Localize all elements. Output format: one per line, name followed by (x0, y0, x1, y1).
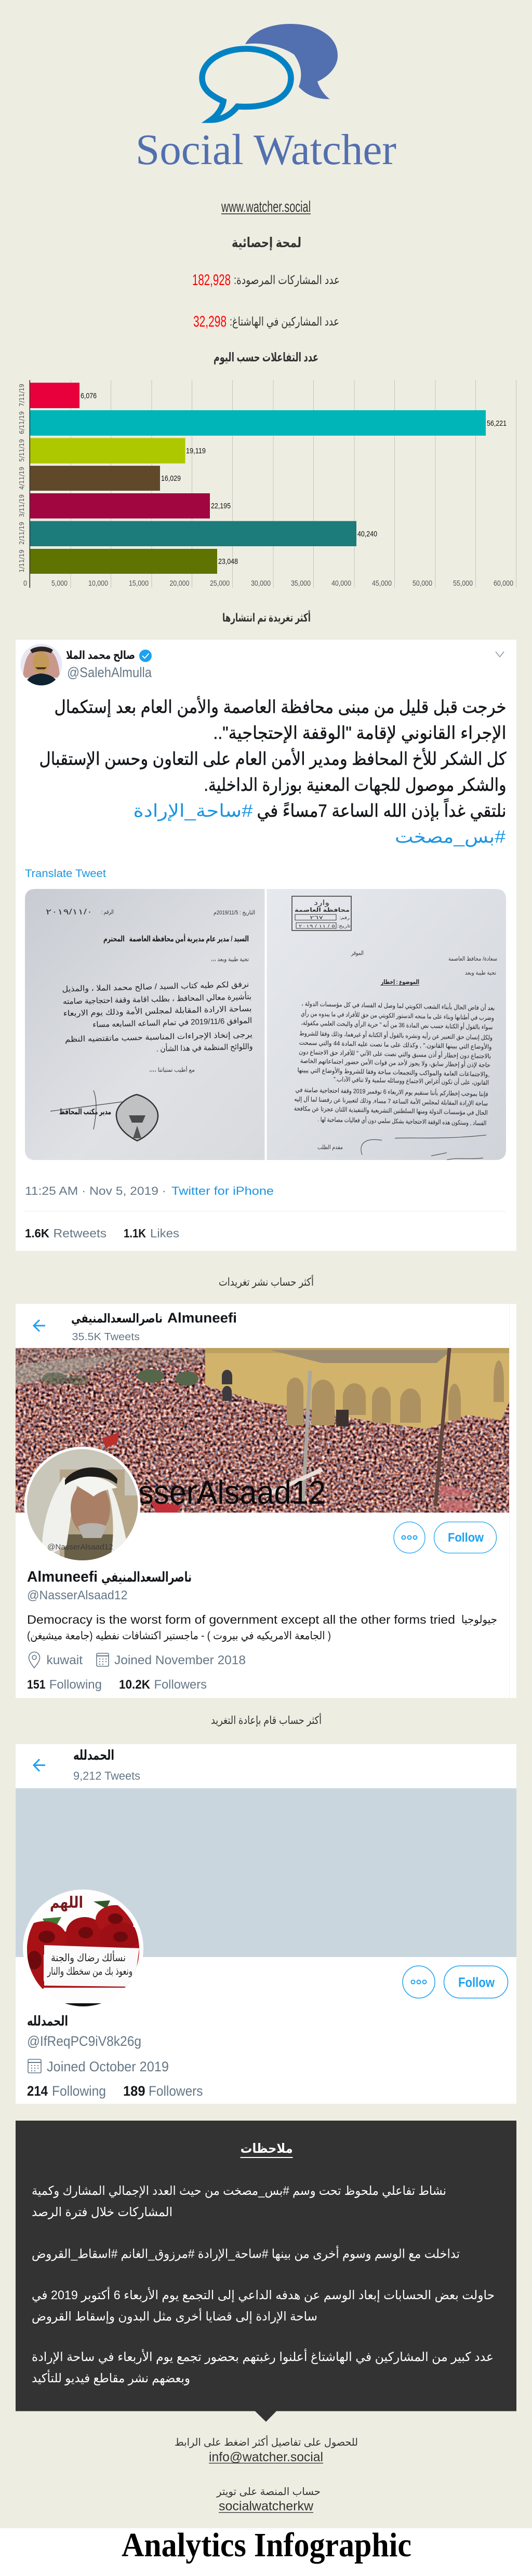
icon: calendar (28, 2059, 41, 2073)
twitter account text: حساب المنصة على تويتر (216, 2486, 321, 2498)
image: left letter (25, 889, 265, 1160)
x axis labels: 20,000 (169, 579, 189, 588)
bar: 3/11/19 (30, 493, 231, 518)
x axis labels: 55,000 (453, 579, 473, 588)
stat: observed posts (192, 272, 340, 289)
image: right letter: سواء بالقول أو الكتابة حسب نص المادة 36 من أنه " حرية الرأي والبحث العلمي مكفولة، (301, 1019, 493, 1031)
notes text: المشاركات خلال فترة الرصد (32, 2205, 172, 2219)
icon: location pin (29, 1652, 39, 1668)
profile name: الحمدلله (27, 2013, 68, 2029)
image: right letter: القانون، على أن تكون أغراض الاجتماع ووسائله سلمية ولا تنافي الآداب." (334, 1075, 489, 1087)
x axis labels: 0 (23, 579, 27, 588)
bar: 6/11/19: 56,221 (487, 419, 507, 428)
button: more (394, 1522, 425, 1553)
notes text: عدد كبير من المشاركين في الهاشتاغ أعلنوا رغبتهم بحضور تجمع يوم الأربعاء في ساحة الإرادة (32, 2349, 494, 2364)
bar: 6/11/19 (30, 410, 507, 436)
icon: tweet author avatar (20, 644, 62, 686)
y axis labels: 6/11/19 (18, 411, 25, 434)
image: right letter: تحية طيبة وبعد (465, 970, 496, 976)
x axis labels: 50,000 (413, 579, 432, 588)
x axis labels: 15,000 (129, 579, 149, 588)
y axis labels: 4/11/19 (18, 467, 25, 490)
panel: most active account card (16, 1304, 516, 1698)
tweet hashtags: #بس_مصخت (395, 827, 506, 847)
button: more (403, 1966, 435, 1998)
heading: overview: لمحة إحصائية (232, 235, 301, 251)
image: right letter: الموضوع : إخطار (380, 978, 419, 986)
image: right letter: ولكل إنسان حق التعبير عن رأيه ونشره بالقول أو الكتابة أو غيرهما، وذلك وفقا للشروط (299, 1029, 493, 1042)
tweet text: نلتقي غداً بإذن الله الساعة 7مساءً في (257, 798, 506, 821)
y axis labels: 2/11/19 (18, 522, 25, 545)
image: right letter: رقم: (339, 915, 350, 920)
icon: calendar (97, 1653, 109, 1666)
bar: 5/11/19 (30, 438, 206, 463)
follow stats: 151 (27, 1678, 46, 1692)
icon: verified badge (139, 650, 152, 662)
icon: profile avatar (24, 1447, 143, 1563)
image: right letter: ساحة الإرادة المقابلة لمجلس الأمة الساعة 7 مساء, وذلك لتعبيرنا عن رفضنا لما آل إليه (294, 1095, 488, 1108)
tweet hashtags: #ساحة_الإرادة (133, 801, 253, 821)
notes text: حاولت بعض الحسابات إبعاد الوسم عن هدفه الداعي إلى التجمع يوم الأربعاء 6 أكتوبر 2019 في (32, 2287, 495, 2303)
profile bio (27, 1613, 497, 1642)
bar: 1/11/19: 23,048 (218, 557, 238, 566)
tweet text: الإجراء القانوني لإقامة "الوقفة الإحتجاجية".. (213, 723, 506, 744)
notes text: ساحة الإرادة إلى قضايا أخرى مثل البدون وإسقاط القروض (32, 2308, 317, 2324)
image: right letter: بعد أن فاض الحال بأبناء الشعب الكويتي لما وصل له الفساد في كل مؤسسات الدولة ، (301, 999, 495, 1012)
bar: 4/11/19: 16,029 (161, 474, 181, 483)
bar: 2/11/19: 40,240 (357, 530, 377, 538)
tweet timestamp: 11:25 AM · Nov 5, 2019 · (25, 1184, 166, 1197)
author handle: @SalehAlmulla (67, 665, 152, 680)
y axis labels (18, 384, 25, 572)
x axis labels: 30,000 (251, 579, 271, 588)
link: email: info@watcher.social (209, 2450, 323, 2464)
icon: roses avatar: ونعوذ بك من سخطك والنار (47, 1966, 132, 1977)
x axis labels: 60,000 (494, 579, 513, 588)
image: right letter: ,والاجتماعات العامة والمواكب والتجمعات مباحة وفقا للشروط والأوضاع التي يبينها (297, 1066, 490, 1078)
follow stats (27, 1678, 207, 1692)
tweet text (39, 696, 507, 821)
x axis labels: 25,000 (210, 579, 230, 588)
image: right letter: تاريخ: (337, 924, 351, 928)
link: website: www.watcher.social (221, 198, 311, 215)
follow stats: 214 (27, 2083, 48, 2099)
follow stats: Following (52, 2083, 106, 2099)
image: right letter: ٢٦٧ (310, 915, 323, 920)
bar: 3/11/19: 22,195 (211, 502, 231, 510)
icon: roses avatar: اللهم (50, 1894, 83, 1912)
location: kuwait (47, 1653, 83, 1667)
follow stats: 10.2K (119, 1678, 151, 1692)
stat: hashtag participants: عدد المشاركين في الهاشتاغ: (230, 315, 339, 329)
follow stats: Following (49, 1678, 102, 1692)
tweet stats: Retweets (53, 1226, 107, 1240)
joined date: Joined October 2019 (47, 2059, 169, 2074)
notes text (32, 2184, 495, 2385)
bar: 7/11/19 (30, 383, 97, 408)
notes text: نشاط تفاعلي ملحوظ تحت وسم #بس_مصخت من حيث العدد الإجمالي المشارك وكمية (32, 2184, 446, 2198)
bar: 7/11/19: 6,076 (81, 392, 97, 400)
heading: most retweeting account: أكثر حساب قام بإعادة التغريد (211, 1713, 322, 1727)
author name: صالح محمد الملا (66, 649, 135, 662)
profile header name (71, 1310, 237, 1326)
notes text: تداخلت مع الوسم وسوم أخرى من بينها #ساحة_الإرادة #مرزوق_الغانم #اسقاط_القروض (32, 2245, 460, 2261)
y axis labels: 7/11/19 (18, 384, 25, 407)
tweet timestamp: Twitter for iPhone (171, 1184, 274, 1197)
panel: top tweet card (16, 640, 516, 1251)
tweet count: 9,212 Tweets (73, 1770, 140, 1782)
contact text: للحصول على تفاصيل أكثر اضغط على الرابط (175, 2435, 358, 2448)
bar: 4/11/19 (30, 466, 181, 491)
profile bio: ( الجامعة الامريكيه في بيروت ) - ماجستير اكتشافات نفطيه (جامعة ميشيغن) (27, 1630, 331, 1642)
icon: profile avatar: @NasserAlsaad12 (47, 1543, 113, 1552)
image: right letter: والأوضاع التي يبينها القانون." , وكذلك على ما نصت عليه المادة 44 والتي سمحت (299, 1039, 492, 1051)
x axis labels: 10,000 (88, 579, 108, 588)
y axis labels: 1/11/19 (18, 549, 25, 572)
stat: hashtag participants: 32,298 (193, 313, 227, 330)
image: left letter: نرفق لكم طيه كتاب السيد / صالح محمد الملا ، والمذيل (62, 980, 249, 994)
heading: most active account: أكثر حساب نشر تغريدات (219, 1275, 314, 1288)
x axis labels: 5,000 (51, 579, 68, 588)
footer banner: Analytics Infographic (122, 2526, 411, 2564)
image: right letter: حاجة لإذن أو إخطار سابق، ولا يجوز لأحد من قوات الأمن حضور اجتماعاتهم الخاصة (300, 1057, 490, 1069)
profile name (27, 1569, 192, 1585)
profile banner (16, 1788, 516, 1957)
heading: interactions by day: عدد التفاعلات حسب اليوم (214, 350, 318, 365)
icon: back arrow (34, 1759, 45, 1771)
image: right letter: بالاجتماع دون إخطار أو أذن مسبق والتي نصت على الآتي " للأفراد حق الاجتماع دون (299, 1048, 491, 1060)
x axis labels: 35,000 (291, 579, 311, 588)
panel: most retweeting account card (16, 1744, 516, 2104)
follow stats (27, 2083, 203, 2099)
image: left letter: الرقم : (101, 909, 114, 915)
image: right letter: الفساد , وستكون هذه الوقفة الاحتجاجية بشكل سلمي دون أي فعاليات مصاحبة لها . (317, 1115, 486, 1127)
button: follow: Follow (458, 1974, 495, 1990)
image: left letter: واللوائح المنظمة في هذا الشأن . (156, 1041, 253, 1054)
profile bio: Democracy is the worst form of government except all the other forms tried (27, 1613, 455, 1626)
image: left letter: السيد / مدير عام مديرية أمن محافظة العاصمة المحترم (103, 934, 249, 943)
profile bio: جيولوجيا (461, 1614, 497, 1626)
icon: roses avatar: نسألك رضاك والجنة (51, 1950, 126, 1964)
stat: observed posts: عدد المشاركات المرصودة: (234, 273, 340, 287)
image: right letter: سعادة/ محافظ العاصمة (448, 956, 497, 962)
image: left letter: بساحة الارادة المقابلة لمجلس الأمة وذلك يوم الاربعاء (63, 1003, 252, 1018)
stat: observed posts: 182,928 (192, 272, 231, 289)
icon: back arrow (34, 1320, 45, 1331)
image: left letter: ٢٠١٩/١١/٠ (46, 908, 92, 916)
profile header name: ناصرالسعدالمنيفي (71, 1312, 163, 1326)
profile name: ناصرالسعدالمنيفي (101, 1569, 192, 1585)
x axis labels: 45,000 (372, 579, 392, 588)
image: left letter: يرجى إتخاذ الإجراءات المناسبة حسب ماتقتضيه النظم (65, 1030, 252, 1044)
image: right letter (267, 889, 506, 1160)
tweet stats: 1.1K (124, 1226, 146, 1240)
image: right letter: فإننا بموجب إخطاركم بأننا سنقيم يوم الاربعاء 6 نوفمبر 2019 وقفة احتجاجية صامتة في (295, 1085, 488, 1098)
panel: notes (16, 2121, 516, 2422)
follow stats: 189 (123, 2083, 145, 2099)
image: left letter: التاريخ : 2019/11/5م (214, 910, 255, 916)
logo: speech bubbles (202, 24, 338, 120)
link: translate tweet: Translate Tweet (25, 868, 106, 880)
follow stats: Followers (154, 1678, 207, 1692)
profile handle: @NasserAlsaad12 (27, 1588, 128, 1602)
tweet stats: 1.6K (25, 1226, 49, 1240)
button: follow (434, 1522, 497, 1553)
profile handle: @IfReqPC9iV8k26g (27, 2033, 141, 2049)
tweet stats: Likes (150, 1226, 179, 1240)
image: left letter: مدير مكتب المحافظ (59, 1108, 111, 1116)
y axis labels: 3/11/19 (18, 494, 25, 517)
tweet stats (25, 1226, 179, 1240)
image: right letter: مقدم الطلب (317, 1144, 343, 1151)
icon: roses avatar (22, 1890, 143, 2007)
tweet hashtags (133, 801, 506, 847)
tweet count: 35.5K Tweets (72, 1331, 140, 1343)
bar: 5/11/19: 19,119 (186, 447, 206, 455)
profile header name: الحمدلله (73, 1747, 114, 1763)
image: left letter: بتأشيرة معالي المحافظ ، بطلب اقامة وقفة احتجاجية صامته (63, 991, 251, 1007)
link: twitter account: socialwatcherkw (219, 2499, 314, 2513)
button: follow: Follow (448, 1531, 484, 1545)
image: right letter: الموقر (351, 950, 364, 956)
image: right letter: وضرب في أطنابها وبناء على ما منحه الدستور الكويتي من حق للأفراد في ما يبدوه من رأي (301, 1009, 494, 1022)
profile name: Almuneefi (27, 1569, 98, 1585)
notes text: وبعضهم نشر مقاطع فيديو للتأكيد (32, 2369, 190, 2385)
image: right letter: ٥ / ١١ / ٢٠١٩ (299, 924, 335, 928)
bar chart: daily interactions (18, 380, 516, 588)
x axis labels (23, 579, 513, 588)
image: left letter: تحية طيبة وبعد ،،، (211, 956, 249, 963)
stat: hashtag participants (193, 313, 339, 330)
tweet timestamp (25, 1184, 274, 1197)
image: crowd banner (16, 1348, 509, 1513)
profile header name: Almuneefi (167, 1310, 237, 1326)
x axis labels: 40,000 (331, 579, 351, 588)
title: Social Watcher: Social Watcher (136, 126, 396, 174)
footer banner (0, 2526, 532, 2576)
bar: 2/11/19 (30, 521, 377, 546)
bar: 1/11/19 (30, 549, 238, 574)
y axis labels: 5/11/19 (18, 439, 25, 462)
image: left letter: مع أطيب تمنياتنا ،،،، (149, 1066, 195, 1073)
banner handle text: NasserAlsaad12 (99, 1474, 326, 1511)
image: right letter: وارد (314, 898, 329, 907)
image: left letter: الموافق 2019/11/6 في تمام الساعه السابعه مساء (92, 1016, 252, 1030)
icon: chevron (496, 652, 504, 657)
button: follow (444, 1966, 508, 1998)
joined date: Joined November 2018 (114, 1653, 246, 1667)
notes heading: ملاحظات (241, 2141, 293, 2156)
image: right letter: محافظة العاصمة (295, 907, 350, 913)
image: right letter: الحال في مؤسسات الدولة ومنها السلطتين التشريعية والتنفيذية اللتان عجزتا عن مكافحة (294, 1105, 488, 1117)
heading: most spread tweet: أكثر تغريدة تم انتشارها (222, 610, 311, 625)
follow stats: Followers (149, 2083, 203, 2099)
